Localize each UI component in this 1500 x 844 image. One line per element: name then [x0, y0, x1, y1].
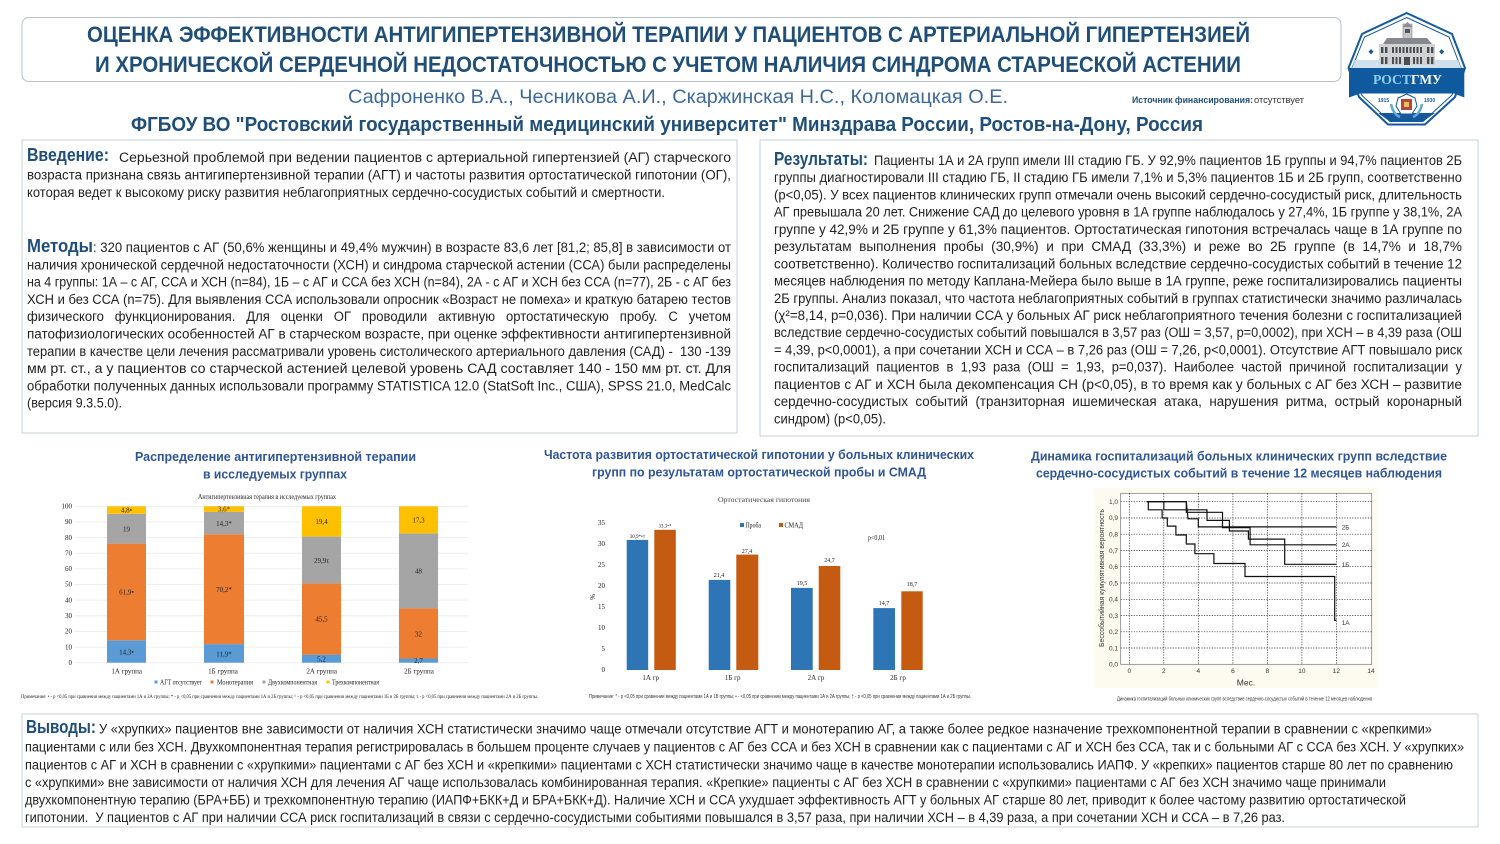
bar: 1Б группа: 3,6* [218, 506, 231, 514]
text block: results: соответственно). Количество госпитализаций больных вследствие сердечно-сосудистых событий в течение 12 [774, 256, 1462, 271]
Kaplan-Meier line chart [1094, 488, 1378, 688]
legend: chart 2: Проба [746, 522, 762, 530]
bar: 2А группа: 19,4 [315, 518, 328, 526]
bar: 1А группа [107, 506, 146, 663]
Kaplan-Meier line chart: 6 [1231, 668, 1235, 675]
legend: chart 1 [154, 678, 380, 686]
grouped bar chart: Ортостатическая гипотония [718, 496, 811, 504]
note: chart 1: Примечание: • - p <0,05 при сравнении между пациентами 1А и 2А группы; * - p <0,05 при сравнении между пациентами 1А и 2Б группы; ^ - p <0,05 при сравнении между пациентами 1Б и 2Б группы; τ - p <0,05 при сравнении между пациентами 2А и 2Б группы. [21, 695, 538, 700]
grouped bar chart: 2А гр [808, 674, 825, 682]
stacked bar chart: 2А группа [306, 668, 338, 676]
Kaplan-Meier line chart: 0,2 [1109, 629, 1118, 636]
curve: 1А [1148, 502, 1336, 620]
curve: 2Б [1147, 502, 1336, 527]
affiliation: ФГБОУ ВО "Ростовский государственный медицинский университет" Минздрава России, Ростов-на-Дону, Россия [131, 114, 1203, 136]
text block: results: результатам выполнения пробы (30,9%) и при СМАД (33,3%) и реже во 2Б группе (в 14,7% и 18,7% [774, 239, 1462, 254]
bar: 2Б группа: 48 [415, 568, 422, 576]
text block: results: месяцев наблюдения по методу Каплана-Мейера было выше в 1А группе, реже госпитализировались пациенты [774, 274, 1462, 288]
text block: introduction [27, 150, 731, 200]
heading: results: Результаты: [774, 149, 868, 169]
Kaplan-Meier line chart: 0,9 [1109, 515, 1118, 522]
grouped bar chart: % [589, 594, 597, 600]
text block: conclusions: двухкомпонентную терапию (БРА+ББ) и трехкомпонентную терапию (ИАПФ+БКК+Д и БРА+БКК+Д). Наличие ХСН и ССА ухудшает эффективность АГТ у больных АГ старше 80 лет, приводит к более частому развитию ортостатической [25, 792, 1406, 808]
curve labels [1342, 524, 1350, 627]
bar: 1Б группа: 11,9* [216, 650, 232, 658]
authors: Сафроненко В.А., Чесникова А.И., Скаржинская Н.С., Коломацкая О.Е. [348, 86, 1008, 108]
grouped bar chart [589, 496, 923, 682]
stacked bar chart: 80 [65, 534, 72, 542]
curve labels: 2Б [1342, 524, 1350, 532]
grouped bar chart: 1А гр [642, 674, 660, 682]
heading: chart 3: Динамика госпитализаций больных клинических групп вследствие [1031, 450, 1447, 464]
Kaplan-Meier line chart: 10 [1298, 668, 1306, 675]
Kaplan-Meier line chart: 0,4 [1109, 597, 1118, 604]
panel: orthostatic hypotension frequency [544, 448, 974, 700]
grouped bar chart: 10 [598, 624, 606, 632]
legend: chart 1: Трехкомпонентная [332, 678, 380, 686]
bar: 2А группа [302, 506, 341, 663]
legend: chart 1: Двухкомпонентная [268, 678, 318, 686]
text block: results: госпитализаций пациентов в 1,93 раза (ОШ = 1,93, p=0,037). Наиболее частой причиной госпитализации у [774, 360, 1462, 375]
panel: antihypertensive therapy distribution [21, 450, 538, 700]
heading: chart 3 [1031, 450, 1447, 480]
text block: results: = 4,39, p<0,0001), а при сочетании ХСН и ССА – в 7,26 раз (ОШ = 7,26, p<0,0001). Отсутствие АГТ повышало риск [774, 342, 1462, 357]
grouped bar chart: 2Б гр [890, 674, 906, 682]
stacked bar chart: 1А группа [111, 668, 143, 676]
stacked bar chart: 30 [65, 612, 72, 620]
text block: introduction: которая ведет к высокому риску развития неблагоприятных сердечно-сосудистых событий и смертности. [27, 185, 665, 200]
bars: 2А гр: 19,5 [797, 581, 807, 587]
title [22, 18, 1341, 82]
text block: introduction: Серьезной проблемой при ведении пациентов с артериальной гипертензией (АГ) старческого [119, 150, 731, 165]
stacked bar chart: Антигипертензивная терапия в исследуемых группах [198, 493, 336, 501]
bars: 2Б гр [873, 582, 923, 670]
text block: methods: физического функционирования. Для оценки ОГ проводили активную ортостатическую пробу. С учетом [27, 309, 731, 324]
heading: methods: Методы [27, 236, 93, 256]
Kaplan-Meier line chart: 1,0 [1109, 499, 1118, 506]
bars: 1А гр: 30,9*•† [630, 535, 646, 540]
panel: hospitalization dynamics [1031, 450, 1447, 702]
text block: methods [27, 240, 731, 411]
stacked bar chart: 0 [68, 659, 72, 667]
text block: conclusions [25, 722, 1464, 825]
grouped bar chart: 0 [602, 666, 606, 674]
Kaplan-Meier line chart: 0,1 [1109, 645, 1118, 652]
bar: 1А группа: 4,8• [121, 506, 133, 514]
p-value annotation: p<0,01 [868, 534, 885, 542]
bar: 2А группа: 45,5 [315, 615, 328, 623]
curve: 1Б [1147, 502, 1336, 564]
Kaplan-Meier line chart: 0 [1127, 668, 1131, 675]
grouped bar chart: 30 [598, 540, 606, 548]
text block: methods: : 320 пациентов с АГ (50,6% женщины и 49,4% мужчин) в возрасте 83,6 лет [81,2; 85,8] в зависимости от [93, 240, 731, 255]
bars: 1Б гр [709, 549, 758, 670]
icon: university logo: ГМУ [1411, 73, 1442, 88]
text block: results: группы диагностировали III стадию ГБ, II стадию ГБ имели 7,1% и 5,3% пациентов 1Б и 2Б групп, соответственно [774, 170, 1462, 185]
panel: results [760, 140, 1478, 436]
stacked bar chart: 90 [65, 518, 72, 526]
text block: results: вследствие сердечно-сосудистых событий повышался в 3,57 раз (ОШ = 3,57, p=0,0002), при ХСН – в 4,39 раза (ОШ [774, 325, 1462, 340]
text block: conclusions: пациентов с АГ и ХСН в сравнении с «хрупкими» пациентами с АГ без ХСН и «крепкими» пациентами с ХСН статистически значимо чаще в качестве монотерапии использовались ИАПФ. У «крепких» пациентов старше 80 лет по сравнению [25, 758, 1453, 772]
text block: results [774, 153, 1462, 426]
bars: 2А гр: 24,7 [824, 558, 835, 564]
grouped bar chart: 5 [602, 645, 606, 653]
text block: results: Пациенты 1А и 2А групп имели III стадию ГБ. У 92,9% пациентов 1Б группы и 94,7% пациентов 2Б [874, 153, 1462, 168]
legend: chart 2: СМАД [784, 522, 803, 530]
text block: methods: (версия 9.3.5.0). [27, 396, 122, 411]
bars: 1Б гр: 21,4 [714, 573, 724, 579]
stacked bar chart: 2Б группа [404, 668, 435, 676]
icon: university logo: 1915 [1378, 98, 1389, 104]
text block: results: АГ превышала 20 лет. Снижение САД до целевого уровня в 1А группе наблюдалось у 27,4%, 1Б группе у 38,1%, 2А [774, 205, 1462, 220]
Kaplan-Meier line chart: 2 [1162, 668, 1166, 675]
bars: 2Б гр: 18,7 [907, 582, 917, 588]
Kaplan-Meier line chart: 0,7 [1109, 548, 1118, 555]
grouped bar chart: 25 [598, 561, 606, 569]
icon: university logo: 1930 [1424, 98, 1435, 104]
heading: chart 2: Частота развития ортостатической гипотонии у больных клинических [544, 448, 974, 462]
bar: 2Б группа [399, 506, 438, 665]
bar: 2А группа: 29,9τ [314, 557, 329, 565]
legend: chart 2 [740, 522, 803, 530]
heading: chart 1 [135, 450, 416, 482]
funding source: отсутствует [1254, 95, 1304, 105]
legend: chart 1: АГТ отсутствует [160, 678, 202, 686]
text block: introduction: возраста признана связь антигипертензивной терапии (АГТ) и частоты развития ортостатической гипотонии (ОГ), [27, 168, 731, 182]
panel: introduction and methods [22, 140, 737, 433]
text block: results: пациентов с АГ и ХСН была декомпенсация СН (p<0,05), в то время как у больных с АГ без ХСН – развитие [774, 377, 1462, 392]
text block: methods: терапии в качестве цели лечения рассматривали уровень систолического артериального давления (САД) - 130 -139 [27, 344, 731, 359]
text block: results: сердечно-сосудистых событий (транзиторная ишемическая атака, нарушения ритма, острый коронарный [774, 394, 1462, 409]
text block: conclusions: гипотонии. У пациентов с АГ при наличии ССА риск госпитализаций в связи с сердечно-сосудистыми событиями повышался в 3,57 раза, при наличии ХСН – в 4,39 раза, а при сочетании ХСН и ССА – в 7,26 раз. [25, 810, 1285, 825]
heading: introduction: Введение: [27, 145, 109, 165]
grouped bar chart: 1Б гр [725, 674, 741, 682]
text block: results: группе у 42,9% и 2Б группе у 61,3% пациентов. Ортостатическая гипотония встречалась чаще в 1А группе по [774, 222, 1462, 237]
Kaplan-Meier line chart: 0,5 [1109, 580, 1118, 587]
icon: university logo [1348, 13, 1465, 124]
title: И ХРОНИЧЕСКОЙ СЕРДЕЧНОЙ НЕДОСТАТОЧНОСТЬЮ С УЧЕТОМ НАЛИЧИЯ СИНДРОМА СТАРЧЕСКОЙ АСТЕНИИ [95, 52, 1241, 77]
bar: 1Б группа [204, 506, 244, 663]
bars: 1А гр: 33,3•* [658, 525, 672, 530]
Kaplan-Meier line chart: 0,6 [1109, 564, 1118, 571]
Kaplan-Meier line chart: 4 [1196, 668, 1200, 675]
funding source: Источник финансирования: [1132, 95, 1253, 105]
grouped bar chart: 20 [598, 582, 606, 590]
title: ОЦЕНКА ЭФФЕКТИВНОСТИ АНТИГИПЕРТЕНЗИВНОЙ ТЕРАПИИ У ПАЦИЕНТОВ С АРТЕРИАЛЬНОЙ ГИПЕРТЕНЗИЕЙ [87, 22, 1250, 47]
Kaplan-Meier line chart: 8 [1266, 668, 1270, 675]
bar: 2Б группа: 32 [415, 630, 422, 638]
stacked bar chart: 20 [65, 628, 72, 636]
stacked bar chart: 60 [65, 565, 72, 573]
bars: 2А гр [791, 558, 840, 670]
bar: 1А группа: 19 [123, 525, 130, 533]
bar: 2А группа: 5,2 [317, 655, 326, 663]
stacked bar chart: 50 [65, 581, 72, 589]
stacked bar chart: 1Б группа [208, 668, 239, 676]
text block: methods: на 4 группы: 1А – с АГ, ССА и ХСН (n=84), 1Б – с АГ и ССА без ХСН (n=84), 2А - с АГ и ХСН без ССА (n=77), 2Б - с АГ без [27, 275, 731, 290]
Kaplan-Meier line chart: 0,8 [1109, 532, 1118, 538]
stacked bar chart [62, 493, 468, 686]
text block: results: синдром) (p<0,05). [774, 411, 886, 426]
heading: conclusions: Выводы: [26, 717, 96, 737]
Kaplan-Meier line chart: 14 [1367, 668, 1375, 675]
text block: conclusions: У «хрупких» пациентов вне зависимости от наличия ХСН статистически значимо чаще отмечали отсутствие АГТ и монотерапию АГ, а также более редкое назначение трехкомпонентной терапии в сравнении с «крепкими» [99, 722, 1432, 736]
bars: 1А гр [627, 525, 676, 670]
stacked bar chart: 40 [65, 596, 72, 604]
text block: methods: патофизиологических особенностей АГ в старческом возрасте, при оценке эффективности антигипертензивной [27, 326, 731, 342]
Kaplan-Meier line chart: 12 [1333, 668, 1340, 675]
curve labels: 1А [1342, 620, 1350, 627]
text block: results: (χ²=8,14, p=0,036). При наличии ССА у больных АГ риск неблагоприятного течения болезни с госпитализацией [774, 308, 1462, 323]
text block: methods: мм рт. ст., а у пациентов со старческой астенией целевой уровень САД составляет 140 - 150 мм рт. ст. Для [27, 361, 731, 376]
curve: 2А [1147, 502, 1336, 545]
heading: chart 1: в исследуемых группах [203, 468, 347, 482]
bar: 1Б группа: 14,3* [216, 520, 232, 528]
text block: results: 2Б группы. Анализ показал, что частота неблагоприятных событий в группах статистически значимо различалась [774, 291, 1462, 306]
stacked bar chart: 70 [65, 549, 72, 557]
Kaplan-Meier line chart: 0,3 [1109, 613, 1118, 620]
grouped bar chart: 15 [598, 603, 606, 611]
bar: 2Б группа: 2,7 [414, 657, 423, 665]
bar: 1А группа: 61,9• [119, 589, 134, 597]
icon: university logo: РОСТ [1373, 73, 1412, 88]
Kaplan-Meier line chart: Мес. [1237, 678, 1255, 688]
note: chart 2: Примечание: * - p <0,05 при сравнении между пациентами 1А и 1Б группы; • - <0,05 при сравнении между пациентами 1А и 2А группы; † - p <0,05 при сравнении между пациентами 1А и 2Б группы. [589, 694, 971, 700]
text block: conclusions: с «хрупкими» вне зависимости от наличия ХСН для лечения АГ чаще использовалась комбинированная терапия. «Крепкие» пациенты с АГ без ХСН в сравнении с «хрупкими» пациентами с АГ без ХСН значимо чаще принимали [25, 775, 1386, 790]
panel: conclusions [22, 714, 1478, 827]
text block: methods: наличия хронической сердечной недостаточности (ХСН) и синдрома старческой астении (ССА) были распределены [27, 257, 731, 272]
heading: chart 2: групп по результатам ортостатической пробы и СМАД [592, 466, 926, 480]
Kaplan-Meier line chart: Бессобытийная кумулятивная вероятность [1097, 509, 1106, 647]
grouped bar chart: 35 [598, 519, 606, 527]
bars: 1Б гр: 27,4 [742, 549, 752, 555]
text block: methods: ХСН и без ССА (n=75). Для выявления ССА использовали опросник «Возраст не помеха» и краткую батарею тестов [27, 292, 731, 307]
heading: chart 1: Распределение антигипертензивной терапии [135, 450, 416, 464]
stacked bar chart: 100 [62, 502, 72, 510]
bar: 1Б группа: 70,2* [216, 586, 232, 594]
curve labels: 2А [1342, 542, 1350, 549]
bar: 1А группа: 14,3• [119, 648, 134, 656]
heading: chart 2 [544, 448, 974, 480]
heading: chart 3: сердечно-сосудистых событий в течение 12 месяцев наблюдения [1036, 466, 1442, 480]
text block: results: (p<0,05). У всех пациентов клинических групп отмечали очень высокий сердечно-сосудистый риск, длительность [774, 187, 1462, 202]
text block: methods: обработки полученных данных использовали программу STATISTICA 12.0 (StatSoft Inc., США), SPSS 21.0, MedCalc [27, 378, 731, 393]
note: chart 3: Динамика госпитализаций больных клинических групп вследствие сердечно-сосудистых событий в течение 12 месяцев наблюдения [1117, 696, 1372, 702]
bar: 2Б группа: 17,3 [412, 517, 425, 525]
legend: chart 1: Монотерапия [217, 678, 254, 686]
Kaplan-Meier line chart: 0,0 [1109, 662, 1118, 669]
stacked bar chart: 10 [65, 643, 72, 651]
bars: 2Б гр: 14,7 [879, 601, 889, 607]
curve labels: 1Б [1342, 562, 1350, 569]
